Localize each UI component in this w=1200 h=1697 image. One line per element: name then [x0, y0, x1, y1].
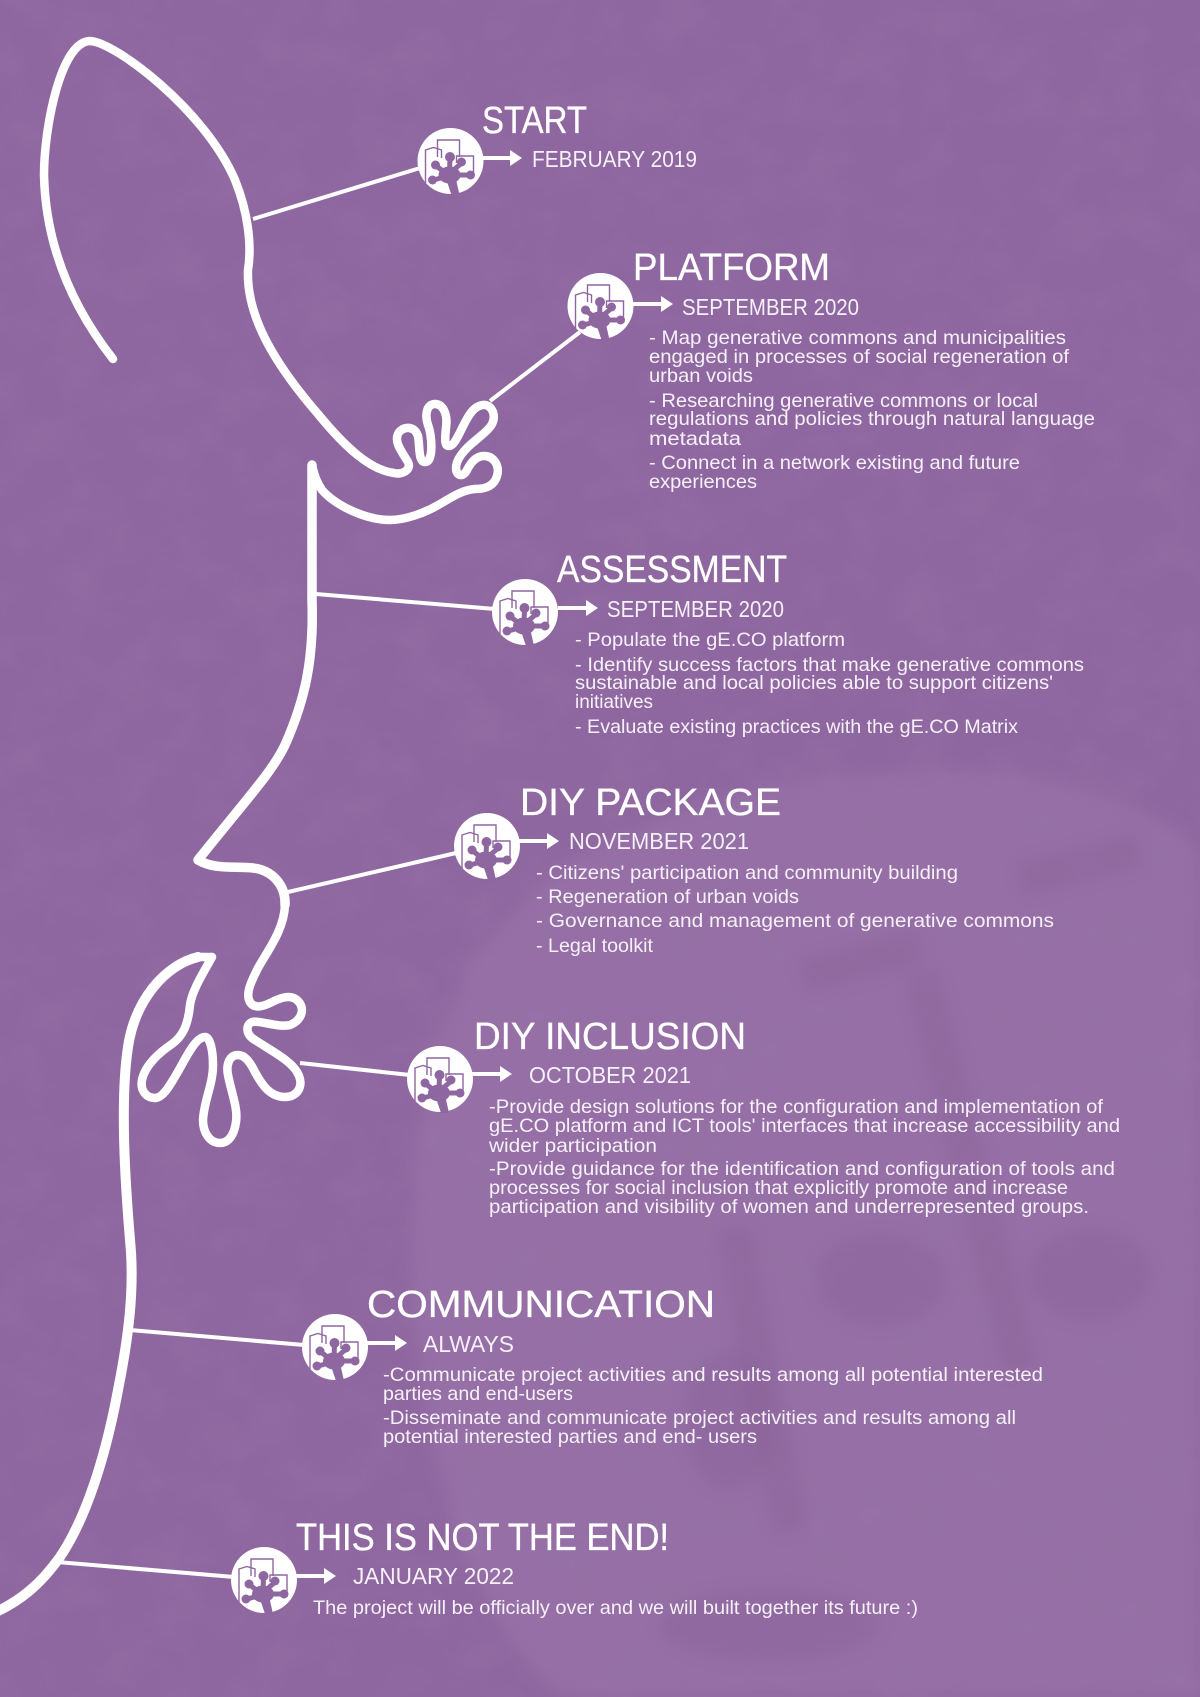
description: sustainable and local policies able to support citizens': [575, 672, 1053, 694]
description: - Governance and management of generative commons: [536, 910, 1054, 932]
date: ALWAYS: [423, 1331, 514, 1357]
heading: ASSESSMENT: [557, 549, 787, 591]
icon: [492, 579, 558, 646]
description: [536, 862, 1054, 957]
description: processes for social inclusion that explicitly promote and increase: [489, 1177, 1068, 1199]
arrow: [367, 1335, 407, 1351]
heading: THIS IS NOT THE END!: [296, 1517, 669, 1559]
description: The project will be officially over and we will built together its future :): [313, 1597, 918, 1619]
heading: PLATFORM: [633, 247, 830, 289]
head and upper hand: [44, 41, 498, 520]
description: [383, 1364, 1043, 1448]
step: this is not the end: [57, 1517, 918, 1619]
date: OCTOBER 2021: [529, 1062, 691, 1088]
lower hand: [142, 905, 302, 1143]
date: NOVEMBER 2021: [569, 828, 749, 854]
body: [0, 957, 198, 1613]
connector: [253, 168, 420, 219]
description: - Populate the gE.CO platform: [575, 629, 845, 651]
description: regulations and policies through natural language: [649, 408, 1095, 430]
lizard outline: [0, 41, 498, 1613]
description: [649, 327, 1095, 493]
description: - Connect in a network existing and future: [649, 452, 1020, 474]
heading: DIY INCLUSION: [474, 1016, 746, 1058]
description: - Regeneration of urban voids: [536, 886, 799, 908]
description: -Disseminate and communicate project activities and results among all: [383, 1407, 1016, 1429]
heading: COMMUNICATION: [367, 1284, 715, 1326]
description: - Citizens' participation and community building: [536, 862, 958, 884]
description: metadata: [649, 428, 741, 450]
neck and snout: [198, 465, 312, 905]
description: -Communicate project activities and results among all potential interested: [383, 1364, 1043, 1386]
description: participation and visibility of women and underrepresented groups.: [489, 1196, 1089, 1218]
icon: [302, 1314, 368, 1381]
icon: [568, 273, 634, 340]
icon: [407, 1046, 473, 1113]
icon: [231, 1547, 297, 1614]
connector: [288, 853, 456, 892]
connector: [300, 1063, 410, 1075]
description: - Map generative commons and municipalities: [649, 327, 1066, 349]
description: urban voids: [649, 365, 753, 387]
description: engaged in processes of social regeneration of: [649, 346, 1070, 368]
icon: [418, 128, 484, 195]
arrow: [558, 600, 598, 616]
step: platform: [490, 247, 1095, 493]
arrow: [482, 150, 522, 166]
connector: [57, 1562, 234, 1577]
heading: DIY PACKAGE: [520, 782, 781, 824]
arrow: [296, 1568, 336, 1584]
description: gE.CO platform and ICT tools' interfaces that increase accessibility and: [489, 1115, 1120, 1137]
faded background logo: [410, 770, 1200, 1697]
heading: START: [482, 100, 587, 142]
description: - Evaluate existing practices with the gE.CO Matrix: [575, 716, 1018, 738]
arrow: [519, 833, 559, 849]
description: parties and end-users: [383, 1383, 573, 1405]
description: [575, 629, 1084, 738]
arrow: [472, 1066, 512, 1082]
description: - Identify success factors that make generative commons: [575, 654, 1084, 676]
connector: [316, 594, 495, 609]
step: assessment: [316, 549, 1084, 738]
date: JANUARY 2022: [353, 1563, 514, 1589]
step: DIY package: [288, 782, 1054, 957]
step: communication: [130, 1284, 1043, 1448]
icon: [454, 813, 520, 880]
description: -Provide guidance for the identification and configuration of tools and: [489, 1158, 1115, 1180]
date: SEPTEMBER 2020: [607, 596, 784, 622]
connector: [490, 332, 580, 401]
step: DIY inclusion: [300, 1016, 1120, 1218]
description: potential interested parties and end- users: [383, 1426, 757, 1448]
description: - Legal toolkit: [536, 935, 654, 957]
connector: [130, 1330, 304, 1345]
description: - Researching generative commons or local: [649, 390, 1038, 412]
description: wider participation: [488, 1135, 657, 1157]
date: FEBRUARY 2019: [532, 146, 697, 172]
step: start: [253, 100, 697, 219]
description: experiences: [649, 471, 757, 493]
date: SEPTEMBER 2020: [682, 294, 859, 320]
description: [488, 1096, 1120, 1218]
description: -Provide design solutions for the configuration and implementation of: [489, 1096, 1104, 1118]
arrow: [633, 296, 673, 312]
description: initiatives: [575, 691, 653, 713]
